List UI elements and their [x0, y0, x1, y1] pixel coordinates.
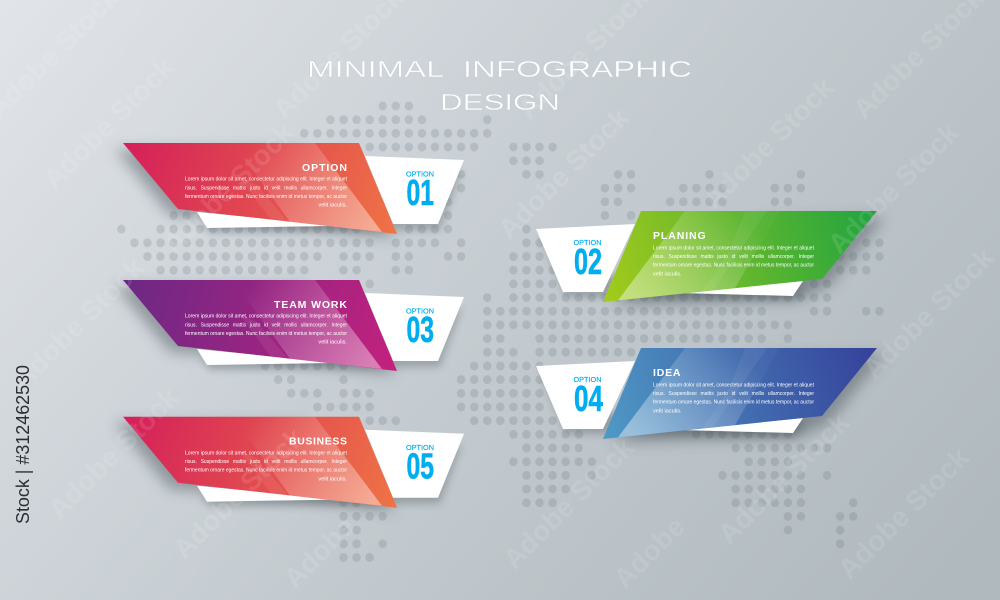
watermarks: Adobe Stock [832, 442, 975, 585]
stock id: Stock | #312462530 [13, 365, 33, 524]
card: option 01: Lorem ipsum dolor sit amet, consectetur adipiscing elit. Integer et aliquet [185, 177, 347, 183]
card: business 05 [115, 417, 464, 512]
watermarks: Adobe Stock [7, 252, 150, 395]
card: team work 03: fermentum ornare egestas. Nunc facilisis enim id metus tempor, ac auctor [185, 331, 347, 337]
card: team work 03: Lorem ipsum dolor sit amet, consectetur adipiscing elit. Integer et aliquet [185, 314, 347, 320]
card: idea 04: IDEA [653, 367, 681, 379]
watermarks: Adobe Stock [492, 102, 635, 245]
card: idea 04: Lorem ipsum dolor sit amet, consectetur adipiscing elit. Integer et aliquet [653, 382, 814, 388]
card: idea 04: velit iaculis. [653, 408, 682, 414]
card: planing 02: Lorem ipsum dolor sit amet, consectetur adipiscing elit. Integer et aliquet [653, 245, 814, 251]
card: business 05: fermentum ornare egestas. Nunc facilisis enim id metus tempor, ac auctor [185, 468, 347, 474]
watermarks: Adobe Stock [37, 52, 180, 195]
card: planing 02 [536, 211, 885, 306]
watermarks: Adobe Stock [697, 72, 840, 215]
watermarks: Adobe Stock [157, 117, 300, 260]
title: DESIGN [440, 89, 560, 115]
watermarks: Adobe Stock [822, 117, 965, 260]
card: planing 02: velit iaculis. [653, 271, 682, 277]
card: option 01: 01 [406, 172, 434, 213]
card: business 05: Lorem ipsum dolor sit amet, consectetur adipiscing elit. Integer et aliquet [185, 450, 347, 456]
card: team work 03: TEAM WORK [274, 299, 347, 311]
card: business 05: OPTION [406, 443, 434, 452]
watermarks: Adobe Stock [857, 242, 1000, 385]
watermarks: Adobe Stock [42, 382, 185, 525]
card: idea 04: 04 [574, 378, 603, 419]
watermarks: Adobe Stock [167, 422, 310, 565]
card: option 01: velit iaculis. [318, 203, 347, 209]
card: business 05: velit iaculis. [318, 476, 347, 482]
card: idea 04: fermentum ornare egestas. Nunc facilisis enim id metus tempor, ac auctor [653, 400, 814, 406]
card: team work 03: risus. Suspendisse mattis justo id velit mollis ullamcorper. Integer [185, 322, 347, 328]
watermarks: Adobe Stock [712, 407, 855, 550]
card: planing 02: fermentum ornare egestas. Nunc facilisis enim id metus tempor, ac auctor [653, 263, 814, 269]
title: MINIMAL INFOGRAPHIC [307, 56, 692, 82]
card: team work 03: velit iaculis. [318, 340, 347, 346]
card: business 05: 05 [406, 446, 434, 487]
card: option 01: risus. Suspendisse mattis justo id velit mollis ullamcorper. Integer [185, 185, 347, 191]
card: planing 02: risus. Suspendisse mattis justo id velit mollis ullamcorper. Integer [653, 254, 814, 260]
title [307, 56, 692, 115]
card: team work 03: 03 [406, 309, 434, 350]
card: planing 02: 02 [574, 241, 602, 282]
card: business 05: risus. Suspendisse mattis justo id velit mollis ullamcorper. Integer [185, 459, 347, 465]
card: idea 04 [536, 348, 885, 443]
card: team work 03: OPTION [406, 306, 434, 316]
card: option 01: fermentum ornare egestas. Nunc facilisis enim id metus tempor, ac auctor [185, 194, 347, 200]
card: idea 04: OPTION [574, 375, 602, 384]
card: option 01: OPTION [406, 170, 434, 178]
card: planing 02: OPTION [574, 238, 602, 247]
watermarks: Adobe Stock [497, 432, 640, 575]
dotted world map [121, 106, 879, 557]
card: option 01: OPTION [302, 162, 347, 174]
card: idea 04: risus. Suspendisse mattis justo id velit mollis ullamcorper. Integer [653, 391, 814, 397]
watermarks: Adobe [607, 511, 691, 594]
card: business 05: BUSINESS [289, 436, 347, 448]
card: team work 03 [115, 280, 464, 375]
card: option 01 [115, 143, 464, 238]
watermarks: Adobe [277, 511, 361, 594]
card: planing 02: PLANING [653, 230, 706, 242]
